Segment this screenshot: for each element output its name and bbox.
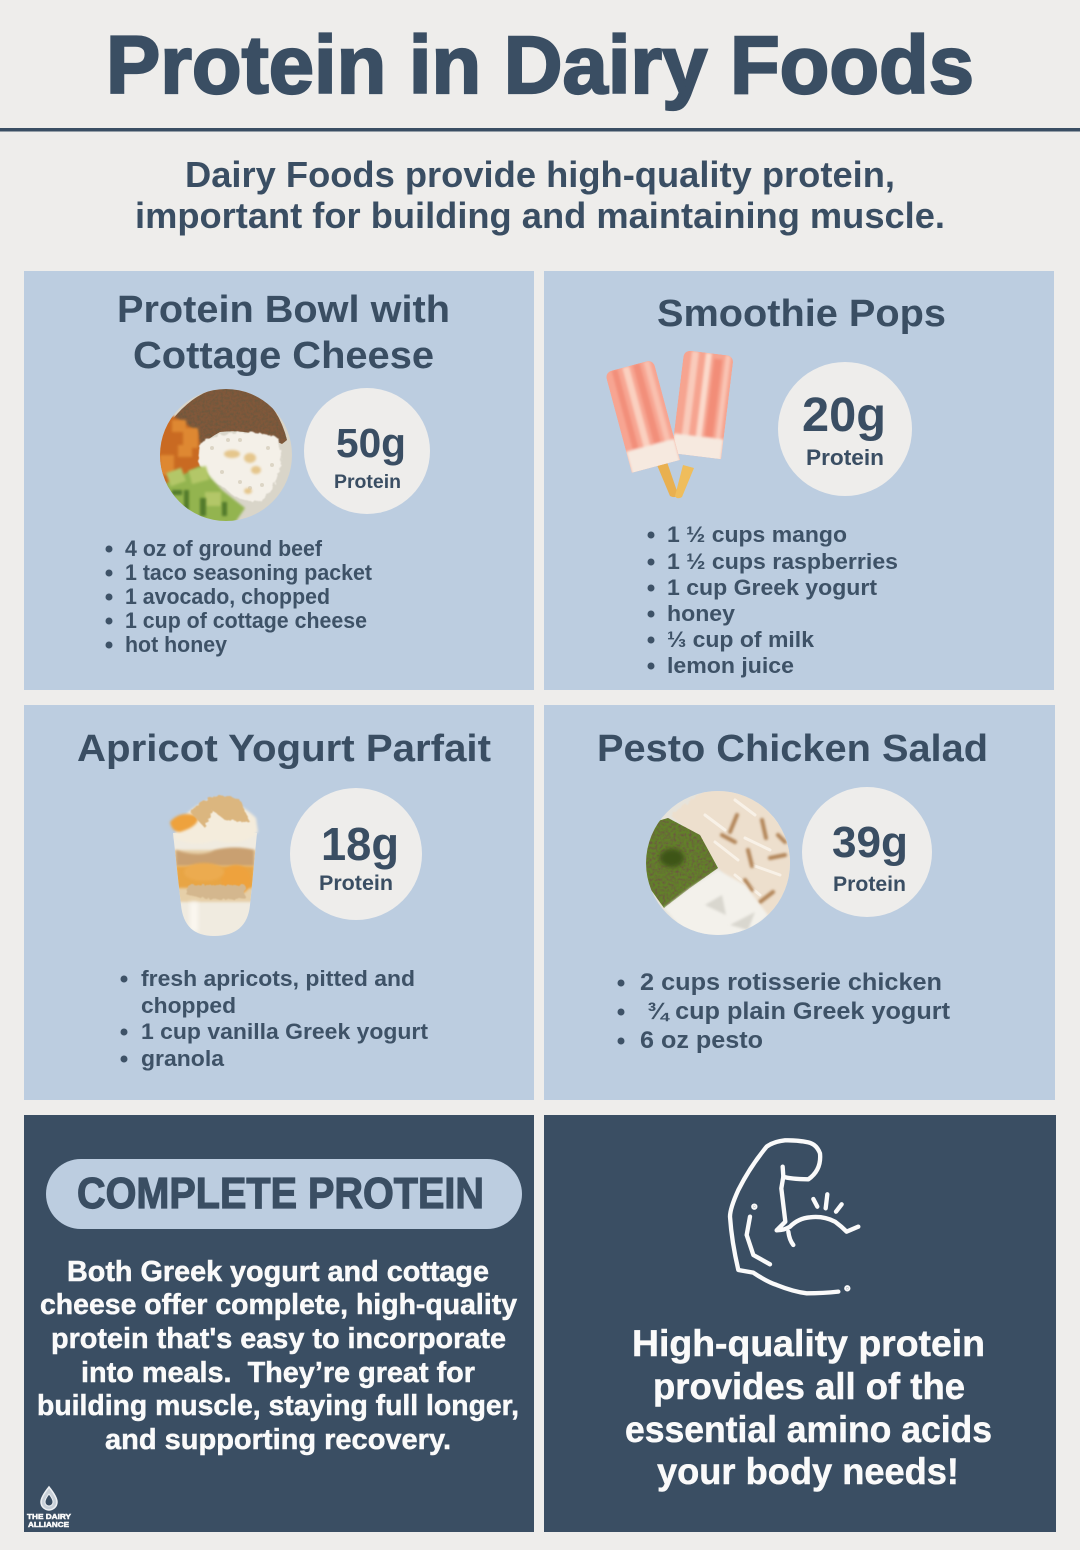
image: protein bowl [160, 389, 292, 521]
body text: complete protein: cheese offer complete, high-quality [40, 1289, 517, 1321]
badge: 39g protein: Protein [833, 873, 906, 896]
ingredient list: smoothie pops: 1 cup Greek yogurt [667, 575, 878, 600]
image: parfait cup [170, 796, 260, 940]
image: salad bowl [644, 790, 795, 938]
logo: the dairy alliance [27, 1487, 71, 1529]
body text: complete protein: building muscle, staying full longer, [37, 1390, 519, 1422]
heading: pesto chicken salad: Pesto Chicken Salad [597, 728, 988, 770]
body text: complete protein: and supporting recovery. [105, 1424, 451, 1456]
ingredient list: parfait: fresh apricots, pitted and [141, 966, 415, 991]
logo: the dairy alliance: ALLIANCE [28, 1520, 69, 1529]
badge: 39g protein [802, 787, 932, 917]
logo: the dairy alliance: THE DAIRY [27, 1512, 71, 1521]
body text: high-quality protein: essential amino acids [625, 1409, 992, 1450]
panel: complete protein [24, 1115, 534, 1532]
ingredient list: smoothie pops: 1 ½ cups raspberries [667, 549, 898, 574]
body text: high-quality protein: High-quality protein [632, 1323, 985, 1364]
panel: apricot yogurt parfait [24, 705, 534, 1100]
ingredient list: smoothie pops: ⅓ cup of milk [667, 627, 815, 652]
ingredient list: parfait: granola [141, 1046, 225, 1071]
ingredient list: salad: 6 oz pesto [640, 1027, 763, 1054]
badge: 18g protein: Protein [319, 872, 393, 895]
ingredient list: parfait: 1 cup vanilla Greek yogurt [141, 1019, 429, 1044]
body text: complete protein: Both Greek yogurt and cottage [67, 1256, 489, 1288]
subtitle: Dairy Foods provide high-quality protein, [185, 154, 895, 195]
body text: complete protein: into meals. They’re great for [81, 1357, 475, 1389]
image: popsicles [605, 350, 734, 498]
ingredient list: smoothie pops [648, 522, 898, 678]
panel: pesto chicken salad [544, 705, 1055, 1100]
ingredient list: protein bowl: hot honey [125, 632, 228, 657]
ingredient list: protein bowl: 1 avocado, chopped [125, 584, 330, 609]
icon: flexed bicep [730, 1140, 858, 1293]
badge: 50g protein [304, 388, 430, 514]
body text: high-quality protein [625, 1323, 992, 1492]
ingredient list: parfait [120, 966, 429, 1071]
ingredient list: smoothie pops: lemon juice [667, 653, 794, 678]
ingredient list: protein bowl: 1 cup of cottage cheese [125, 608, 367, 633]
badge: 50g protein: Protein [334, 472, 401, 493]
panel: high-quality protein [544, 1115, 1056, 1532]
body text: complete protein: protein that's easy to incorporate [51, 1323, 506, 1355]
ingredient list: salad: 2 cups rotisserie chicken [640, 969, 942, 996]
title: Protein in Dairy Foods [106, 20, 974, 111]
body text: complete protein [37, 1256, 519, 1456]
ingredient list: salad [618, 969, 950, 1054]
badge: 18g protein [290, 788, 422, 920]
heading: apricot yogurt parfait: Apricot Yogurt Parfait [77, 728, 491, 770]
ingredient list: protein bowl: 1 taco seasoning packet [125, 560, 373, 585]
heading: protein bowl: Cottage Cheese [133, 335, 434, 377]
ingredient list: protein bowl [106, 536, 373, 657]
panel: smoothie pops [544, 271, 1054, 690]
heading: protein bowl: Protein Bowl with [117, 289, 450, 331]
badge: 20g protein: Protein [806, 445, 884, 470]
ingredient list: protein bowl: 4 oz of ground beef [125, 536, 323, 561]
subtitle [135, 154, 945, 236]
ingredient list: smoothie pops: 1 ½ cups mango [667, 522, 847, 547]
subtitle: important for building and maintaining muscle. [135, 195, 945, 236]
ingredient list: smoothie pops: honey [667, 601, 736, 626]
ingredient list: salad: ¾ cup plain Greek yogurt [647, 998, 950, 1025]
pill heading: complete protein: COMPLETE PROTEIN [77, 1169, 484, 1218]
ingredient list: parfait: chopped [141, 993, 236, 1018]
heading: smoothie pops: Smoothie Pops [657, 293, 946, 335]
badge: 20g protein: 20g [802, 389, 886, 442]
body text: high-quality protein: provides all of the [653, 1366, 965, 1407]
panel: protein bowl with cottage cheese [24, 271, 534, 690]
pill heading: complete protein [46, 1159, 522, 1229]
badge: 20g protein [778, 362, 912, 496]
heading: protein bowl [117, 289, 450, 377]
badge: 39g protein: 39g [832, 818, 908, 867]
body text: high-quality protein: your body needs! [657, 1451, 959, 1492]
badge: 50g protein: 50g [336, 420, 406, 466]
badge: 18g protein: 18g [321, 818, 399, 870]
